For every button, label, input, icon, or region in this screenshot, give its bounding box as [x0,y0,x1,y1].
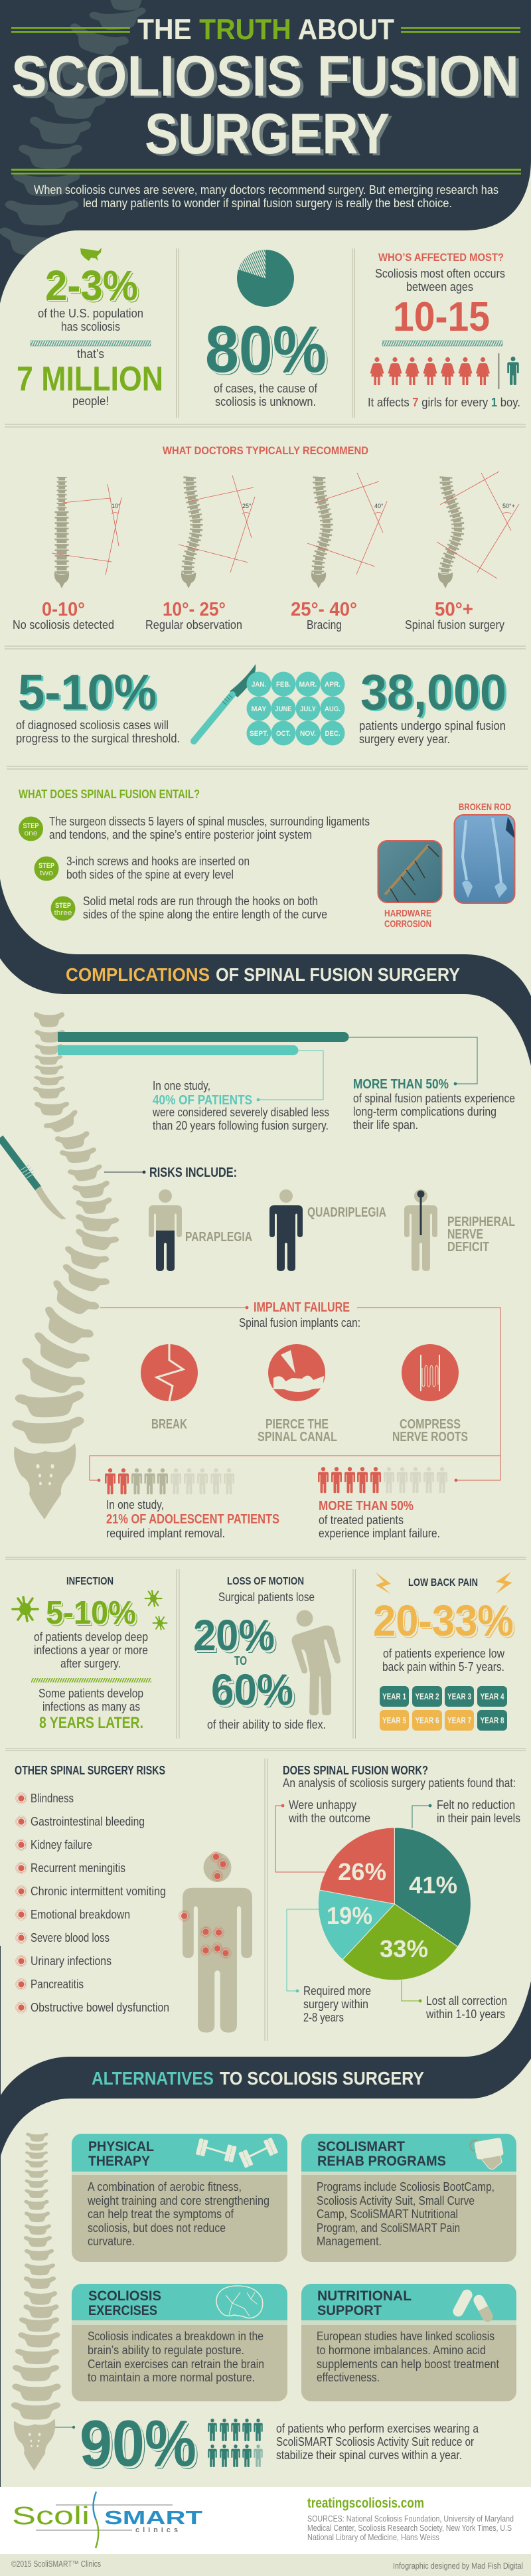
photo: hardware corrosion [378,841,442,930]
pie labels: 19% [327,1902,372,1929]
card text [88,2330,264,2384]
caption: of patients who perform exercises wearing a [276,2422,479,2435]
text: deep infections: of patients develop deep [34,1630,148,1644]
body figure with risk spots [179,1851,252,2033]
risk: peripheral nerve deficit: PERIPHERAL [447,1215,515,1229]
icon: dumbbells [196,2138,278,2168]
heading: implant failure [90,1300,500,1482]
year grid: YEAR 4 [481,1691,504,1701]
logo: ScoliSMART Clinics: Scoli [12,2502,90,2530]
callout: 40% of patients: than 20 years following fusion surgery. [153,1119,329,1132]
card title: SCOLISMART [317,2139,405,2154]
card text: to maintain a more normal posture. [88,2371,255,2384]
risk: peripheral nerve deficit [404,1189,515,1271]
text: later infections [38,1687,143,1732]
icon row: ten people, two red [105,1468,234,1494]
step one: and tendons, and the spine’s entire posterior joint system [49,828,312,841]
heading: INFECTION [66,1576,114,1587]
callout: 40% of patients [152,1079,329,1132]
spine diagram: 0-10 degrees [52,477,121,588]
card title: PHYSICAL [88,2139,154,2154]
callout: lost correction: Lost all correction [426,1994,507,2008]
text: that's: that’s [77,347,104,361]
stat: more than 50% implant failure: experience implant failure. [319,1527,440,1540]
text: later infections: 8 YEARS LATER. [39,1714,143,1732]
stat: 38,000 patients: 38,000 [360,664,506,720]
step one: STEP [23,822,38,830]
title [11,13,519,166]
website and sources [307,2496,514,2542]
card title: SUPPORT [317,2303,382,2318]
step three: three [54,909,72,917]
callout: unhappy: with the outcome [288,1812,370,1825]
caption: population: of the U.S. population [38,307,143,320]
ghost spine in header [0,0,149,262]
caption: ScoliSMART Scoliosis Activity Suit reduce or [276,2435,474,2448]
spine diagram: 25-40 degrees [307,473,387,588]
stat: 90% [55,2407,479,2480]
text: later infections: Some patients develop [38,1687,143,1700]
icon: break: BREAK [151,1417,187,1432]
risk: paraplegia [149,1189,252,1271]
heading: what doctors recommend: WHAT DOCTORS TYPICALLY RECOMMEND [163,444,368,457]
caption: back pain within 5-7 years. [382,1660,504,1674]
callout: more than 50% [353,1077,515,1132]
card title: NUTRITIONAL [317,2288,412,2304]
panel: loss of motion [193,1576,341,1731]
heading: WHO’S AFFECTED MOST? [378,251,504,264]
icon: pierce the spinal canal: PIERCE THE [266,1417,329,1432]
stat: 38,000 patients: surgery every year. [359,732,450,746]
panel: infection [13,1576,167,1732]
icon: US map [80,248,102,261]
website and sources: National Library of Medicine, Hans Weiss [307,2532,439,2542]
icon: scalpel [194,664,256,741]
spine: alternatives spine [11,2133,61,2470]
calendar months grid: AUG. [325,705,341,713]
card text: scoliosis, but does not reduce [88,2221,226,2235]
icon: compress nerve roots: NERVE ROOTS [392,1430,468,1444]
card text: supplements can help boost treatment [317,2358,499,2371]
caption: population: has scoliosis [61,320,120,333]
header background panel [0,0,531,303]
risk: peripheral nerve deficit: NERVE [447,1227,483,1242]
calendar months grid: OCT. [276,730,291,738]
risk list: Urinary infections [31,1954,112,1968]
step two: two [40,869,53,877]
spine diagram: 10-25 degrees: 25° [242,503,252,509]
callout: more than 50%: MORE THAN 50% [353,1077,449,1092]
risk list: Kidney failure [31,1838,92,1851]
copyright: ©2015 ScoliSMART™ Clinics [11,2559,101,2569]
text: deep infections: infections a year or more [34,1644,148,1657]
caption: of patients experience low [383,1647,505,1660]
stat: more than 50% implant failure: MORE THAN 50% [319,1499,414,1513]
heading: DOES SPINAL FUSION WORK? [283,1764,428,1777]
card: physical therapy [72,2134,287,2262]
text: deep infections [34,1630,148,1670]
calendar months grid: FEB. [276,681,291,689]
logo: ScoliSMART Clinics: SMART [104,2508,202,2529]
card title: THERAPY [88,2154,150,2169]
banner: alternatives [0,1981,531,2158]
pie labels: 33% [380,1935,428,1962]
calendar months grid: JAN. [252,681,266,689]
step two: STEP [38,862,54,870]
text: most often occurs: between ages [406,280,473,294]
card text: Program, and ScoliSMART Pain [317,2221,460,2235]
stat: 5-10%: 5-10% [46,1595,136,1631]
photo: broken rod [454,802,515,903]
card title [88,2139,154,2169]
heading: complications of spinal fusion surgery [66,964,460,985]
card title: EXERCISES [88,2303,157,2318]
icon: break [141,1344,198,1432]
heading: risks include: RISKS INCLUDE: [149,1165,237,1180]
logo: ScoliSMART Clinics [12,2492,202,2548]
icon: leaning person [292,1610,341,1715]
card title: REHAB PROGRAMS [317,2154,446,2169]
risk list: Recurrent meningitis [31,1861,125,1875]
bar: 40 percent [58,1045,299,1055]
caption: unknown cause: of cases, the cause of [214,382,318,395]
panel: does spinal fusion work [275,1764,520,2024]
label: 25-40: 25°- 40° [291,599,357,620]
calendar months grid: MAY [251,705,267,713]
risk list: Emotional breakdown [31,1908,130,1921]
icon row: ten people, five red [318,1467,447,1493]
card text: A combination of aerobic fitness, [88,2180,242,2193]
label: 10-25: 10°- 25° [163,599,226,620]
stat: 38,000 patients [359,664,506,746]
caption [276,2422,479,2462]
spine diagram: 10-25 degrees [179,475,255,588]
label: 0-10 [13,599,114,632]
step one [19,815,370,841]
stat: more than 50% implant failure: of treated patients [319,1513,404,1527]
year grid [380,1686,507,1731]
spine diagram: 50+ degrees [437,472,519,588]
calendar months grid: NOV. [300,730,316,738]
calendar months grid: SEPT. [250,730,268,738]
card text: curvature. [88,2235,135,2248]
icon: large scalpel [0,1138,66,1219]
callout: 40% of patients: 40% OF PATIENTS [153,1093,252,1108]
icon: lightning bolts [375,1572,512,1594]
text: surgical patients lose: Surgical patients lose [218,1590,315,1604]
callout: more surgery [287,1909,371,2024]
callout: no pain reduction: in their pain levels [437,1812,520,1825]
icon: pills [451,2288,494,2324]
icon: germ splats [13,1590,167,1630]
stat: 38,000 patients: patients undergo spinal fusion [359,719,506,732]
card: scoliosis exercises [72,2284,287,2401]
risk: quadriplegia: QUADRIPLEGIA [307,1205,386,1220]
callout: lost correction [402,1980,507,2021]
step two [35,855,250,881]
risk list: Severe blood loss [31,1931,110,1944]
icon: compress nerve roots: COMPRESS [400,1417,461,1432]
card title [88,2288,161,2318]
card: nutritional support [301,2284,516,2401]
stat: 21% of adolescent patients: In one study, [106,1498,164,1511]
stat: 60%: 60% [211,1665,293,1714]
stat: 2-3%: 2-3% [45,262,138,309]
risk: peripheral nerve deficit: DEFICIT [447,1240,489,1254]
calendar months grid: MAR. [299,681,317,689]
year grid: YEAR 2 [416,1691,439,1701]
stat: 21% of adolescent patients [105,1468,279,1540]
heading: OTHER SPINAL SURGERY RISKS [15,1764,165,1777]
calendar months grid: APR. [325,681,341,689]
card text: Scoliosis Activity Suit, Small Curve [317,2194,475,2207]
intro paragraph: led many patients to wonder if spinal fusion surgery is really the best choice. [83,197,452,210]
caption [382,1647,505,1674]
card: scolismart rehab programs [301,2134,516,2262]
caption: population [38,307,143,333]
label: 50+: Spinal fusion surgery [405,618,504,632]
card text [317,2330,499,2384]
icon: dog tags [470,2138,504,2169]
card text: Certain exercises can retrain the brain [88,2358,264,2371]
pie labels: 26% [338,1858,386,1885]
step three: sides of the spine along the entire length of the curve [83,908,327,921]
card text: European studies have linked scoliosis [317,2330,494,2343]
heading: alternatives to scoliosis surgery: TO SCOLIOSIS SURGERY [220,2068,424,2089]
spine: large complications spine [12,1012,119,1519]
heading: spinal fusion entail: WHAT DOES SPINAL FUSION ENTAIL? [19,788,200,801]
title line one: THE TRUTH ABOUT [137,13,394,46]
label: 25-40 [291,599,357,632]
step one: one [24,829,37,837]
caption: unknown cause [214,382,318,408]
calendar months grid: JULY [300,705,317,713]
risk list: Blindness [31,1792,74,1805]
step one: The surgeon dissects 5 layers of spinal muscles, surrounding ligaments [49,815,370,828]
caption: unknown cause: scoliosis is unknown. [215,395,316,408]
stat: 21% of adolescent patients: required implant removal. [106,1527,225,1540]
step three: STEP [55,902,71,910]
panel: who's affected most [368,251,520,409]
caption: girls to boys: It affects 7 girls for every 1 boy. [368,396,520,409]
photo: hardware corrosion: CORROSION [384,918,431,930]
risk: paraplegia: PARAPLEGIA [185,1230,252,1245]
card text [317,2180,494,2248]
text: most often occurs [375,267,505,294]
risk: quadriplegia [269,1189,386,1271]
stat: more than 50% implant failure [318,1467,447,1540]
panel: low back pain [373,1572,514,1731]
step two: both sides of the spine at every level [66,868,234,881]
label: 50+ [405,599,504,632]
stat: 80%: 80% [205,312,327,386]
icon: seven girls and one boy [370,353,519,389]
label: 10-25 [145,599,242,632]
step three [50,895,327,921]
photo: broken rod: BROKEN ROD [459,802,511,813]
risk list: Gastrointestinal bleeding [31,1815,145,1828]
spine diagram: 25-40 degrees: 40° [374,503,384,509]
callout: no pain reduction [412,1798,520,1828]
label: 0-10: No scoliosis detected [13,618,114,632]
heading: complications of spinal fusion surgery: COMPLICATIONS [66,964,210,985]
card text: Scoliosis indicates a breakdown in the [88,2330,264,2343]
calendar months grid: JUNE [275,705,292,713]
spine diagram: 50+ degrees: 50°+ [502,503,515,509]
heading: alternatives to scoliosis surgery [92,2068,424,2089]
text: deep infections: after surgery. [60,1657,121,1670]
stat: 21% of adolescent patients: 21% OF ADOLESCENT PATIENTS [106,1512,279,1527]
stat: 7 million: 7 MILLION [17,360,163,398]
title line three: SURGERY [145,102,390,166]
card text: brain’s ability to regulate posture. [88,2344,244,2357]
year grid: YEAR 5 [382,1715,406,1725]
callout: unhappy [275,1798,370,1872]
calendar months grid [247,672,345,745]
website and sources: treatingscoliosis.com [307,2496,424,2511]
bar: more than 50 percent [58,1032,349,1042]
card text: Camp, ScoliSMART Nutritional [317,2207,458,2221]
footer panel [0,2487,531,2576]
callout: 40% of patients: were considered severely disabled less [152,1106,329,1119]
pie chart: 80 percent [237,250,294,307]
pie labels [327,1858,457,1962]
card title: SCOLIOSIS [88,2288,161,2304]
callout: more surgery: Required more [303,1984,371,1998]
stat: 10-15: 10-15 [393,294,490,340]
card text: Management. [317,2235,382,2248]
label: 50+: 50°+ [435,599,473,620]
heading: implant failure: Spinal fusion implants can: [239,1316,360,1330]
stat: 5-10% progress [16,664,180,745]
calendar months grid: DEC. [325,730,340,738]
step two: 3-inch screws and hooks are inserted on [66,855,250,868]
callout: no pain reduction: Felt no reduction [437,1798,515,1812]
panel: US prevalence [17,248,163,408]
photo: hardware corrosion: HARDWARE [384,908,431,919]
icon: pierce the spinal canal: SPINAL CANAL [258,1430,337,1444]
card title [317,2288,412,2318]
heading: LOSS OF MOTION [227,1576,304,1587]
spine diagram: 0-10 degrees: 10° [112,503,121,509]
label: 0-10: 0-10° [42,599,85,620]
number: 90% [80,2407,196,2480]
year grid: YEAR 6 [416,1715,439,1725]
caption: side flex: of their ability to side flex. [207,1718,326,1731]
stat: 20%: 20% [193,1610,275,1660]
stat: 5-10% progress: progress to the surgical threshold. [16,732,180,745]
risk list: Obstructive bowel dysfunction [31,2001,169,2014]
icon: compress nerve roots [392,1344,468,1444]
risk list: Pancreatitis [31,1978,84,1991]
intro paragraph [34,183,498,210]
callout: unhappy: Were unhappy [289,1798,356,1812]
card text: to hormone imbalances. Amino acid [317,2344,486,2357]
step three: Solid metal rods are run through the hooks on both [83,895,318,908]
pie chart [318,1828,471,1980]
year grid: YEAR 8 [481,1715,504,1725]
logo: ScoliSMART Clinics: clinics [135,2526,178,2534]
card text [87,2180,269,2248]
heading: complications of spinal fusion surgery: OF SPINAL FUSION SURGERY [216,964,460,985]
card text: weight training and core strengthening [87,2194,269,2207]
text: to: TO [234,1654,247,1668]
heading: alternatives to scoliosis surgery: ALTERNATIVES [92,2068,214,2089]
stat: 20-33%: 20-33% [373,1596,514,1645]
heading: risks include [104,1165,237,1180]
year grid: YEAR 1 [382,1691,406,1701]
text: most often occurs: Scoliosis most often occurs [375,267,505,280]
callout: more surgery: surgery within [303,1998,368,2011]
icon: brain [216,2286,263,2318]
recommendation labels [13,599,504,632]
heading: implant failure: IMPLANT FAILURE [254,1300,350,1315]
icon grid: ten people [208,2419,263,2467]
banner: complications [0,879,531,1066]
card text: can help treat the symptoms of [88,2207,234,2221]
callout: more than 50%: long-term complications during [353,1105,496,1118]
stat: 5-10% progress: 5-10% [18,664,157,720]
callout: 40% of patients: In one study, [153,1079,210,1092]
risk list: Chronic intermittent vomiting [31,1885,166,1898]
label: 25-40: Bracing [307,618,342,632]
card title [317,2139,446,2169]
year grid: YEAR 3 [447,1691,471,1701]
callout: more than 50%: their life span. [353,1118,418,1132]
label: 10-25: Regular observation [145,618,242,632]
year grid: YEAR 7 [447,1715,471,1725]
caption: stabilize their spinal curves within a year. [276,2448,462,2462]
text: later infections: infections as many as [42,1700,140,1713]
callout: lost correction: within 1-10 years [425,2008,505,2021]
pie labels: 41% [409,1871,457,1899]
card text: effectiveness. [317,2371,380,2384]
card text: Programs include Scoliosis BootCamp, [317,2180,494,2193]
text: people: people! [72,394,109,408]
panel: unknown cause [205,250,327,408]
panel: other spinal surgery risks [15,1764,252,2033]
heading: LOW BACK PAIN [408,1577,478,1589]
risk list [16,1792,169,2014]
chart: bars with callouts [58,1032,477,1101]
callout: more surgery: 2-8 years [303,2011,344,2024]
stat: 5-10% progress: of diagnosed scoliosis cases will [16,719,169,732]
icon: pierce the spinal canal [258,1344,337,1444]
